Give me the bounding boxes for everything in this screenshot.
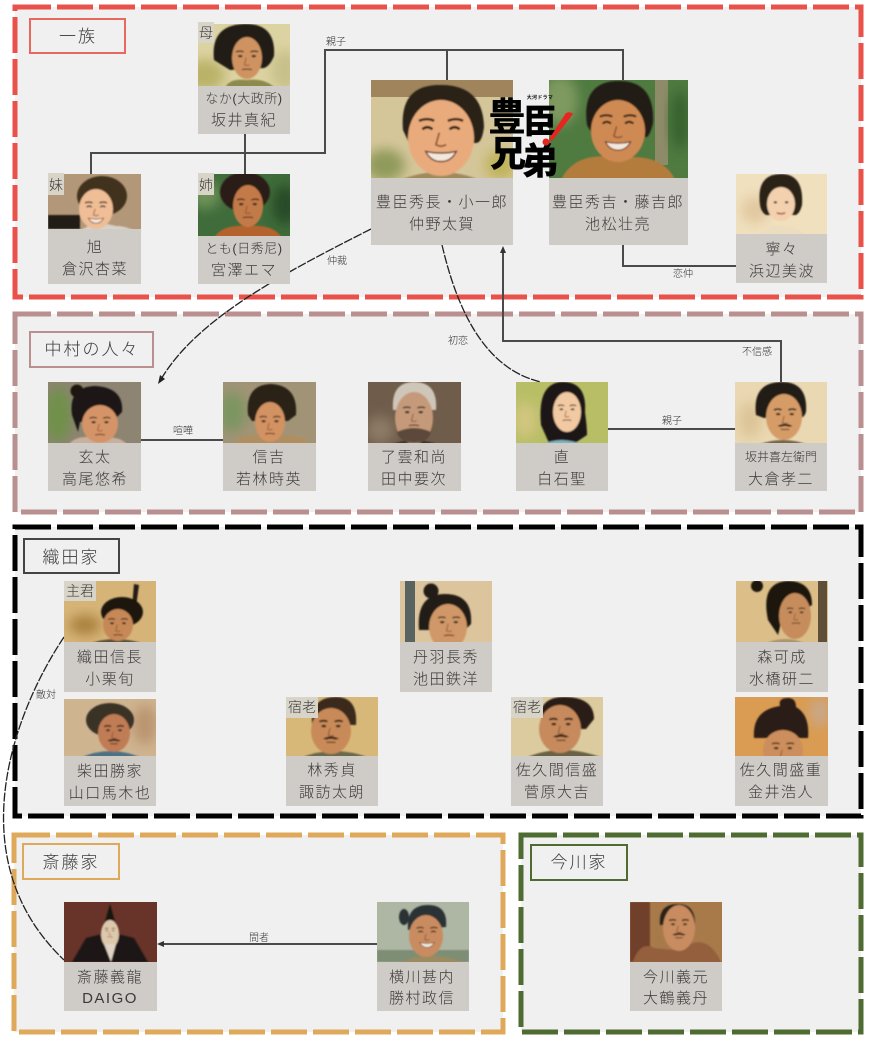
relation: 間者 arrow [157, 932, 377, 947]
logo: 豊臣兄弟: 大河ドラマ [527, 94, 553, 101]
card: 寧々: 浜辺美波 [749, 263, 815, 280]
tag: 宿老: 宿老 [513, 699, 541, 715]
card: 横川甚内 [377, 902, 469, 1011]
card: 直: 白石聖 [537, 471, 587, 488]
card: 佐久間盛重: 金井浩人 [748, 784, 814, 801]
card: 織田信長 [64, 581, 156, 692]
card: 佐久間信盛 [511, 697, 603, 806]
card: 玄太: 玄太 [78, 449, 112, 466]
card: 玄太: 高尾悠希 [62, 471, 128, 488]
card: 旭: 旭 [87, 239, 103, 256]
heading: 今川家 [531, 845, 627, 880]
card: とも: とも(日秀尼) [205, 241, 283, 256]
card: 佐久間信盛: 佐久間信盛 [516, 762, 598, 779]
card: 豊臣秀吉 [542, 75, 689, 245]
heading: 今川家: 今川家 [550, 853, 608, 872]
card: 丹羽長秀 [400, 581, 492, 692]
card: 柴田勝家: 山口馬木也 [69, 785, 151, 802]
panel: 一族 [15, 7, 861, 297]
card: とも: 宮澤エマ [211, 262, 277, 279]
card: 寧々 [736, 174, 827, 283]
panel: 織田家 [15, 527, 861, 816]
tag: 主君: 主君 [66, 583, 94, 599]
card: 坂井喜左衛門 [735, 382, 827, 491]
card: 林秀貞: 諏訪太朗 [299, 784, 365, 801]
heading: 斎藤家 [23, 844, 119, 879]
card: 坂井喜左衛門: 坂井喜左衛門 [745, 450, 817, 464]
card: 豊臣秀吉: 豊臣秀吉・藤吉郎 [552, 194, 684, 211]
relation: 恋仲 [623, 245, 736, 280]
heading: 一族: 一族 [59, 27, 97, 46]
card: 斎藤義龍: 斎藤義龍 [77, 969, 143, 986]
relation: 間者 arrow: 間者 [249, 932, 269, 944]
card: 旭 [48, 173, 141, 284]
heading: 中村の人々 [30, 332, 153, 367]
panel: 今川家 [521, 835, 861, 1032]
card: 横川甚内: 勝村政信 [389, 990, 455, 1007]
card: 了雲和尚: 田中要次 [381, 471, 447, 488]
card: 豊臣秀吉: 池松壮亮 [585, 216, 651, 233]
card: 寧々: 寧々 [765, 241, 799, 258]
card: 佐久間信盛: 菅原大吉 [524, 784, 590, 801]
relation: 仲裁 arrow [158, 229, 371, 384]
heading: 中村の人々: 中村の人々 [44, 340, 140, 359]
card: 今川義元: 今川義元 [643, 969, 709, 986]
relation: 親子 直 [608, 415, 735, 429]
card: 柴田勝家: 柴田勝家 [77, 763, 143, 780]
relation: 恋仲: 恋仲 [673, 268, 693, 280]
card: 豊臣秀長: 豊臣秀長・小一郎 [376, 194, 508, 211]
card: 森可成: 森可成 [757, 649, 807, 666]
card: 林秀貞: 林秀貞 [307, 762, 357, 779]
tag: 母: 母 [199, 25, 213, 41]
relation: 仲裁 arrow: 仲裁 [327, 254, 347, 267]
relation: 初恋 curve [442, 245, 541, 382]
card: 了雲和尚: 了雲和尚 [381, 449, 447, 466]
card: 森可成: 水橋研二 [749, 671, 815, 688]
card: 丹羽長秀: 池田鉄洋 [413, 671, 479, 688]
card: 直 [513, 382, 608, 491]
card: 斎藤義龍: DAIGO [82, 990, 138, 1007]
tag: 宿老: 宿老 [288, 699, 316, 715]
card: 林秀貞 [286, 697, 378, 806]
relation: 不信感 arrow [500, 246, 781, 382]
panel: 斎藤家 [14, 835, 503, 1032]
card: 坂井喜左衛門: 大倉孝二 [748, 471, 814, 488]
relation lines: 親子 family tree [91, 36, 623, 174]
relation: 親子 直: 親子 [662, 415, 682, 427]
card: なか [185, 22, 299, 134]
card: なか: なか(大政所) [205, 91, 283, 106]
panel: 中村の人々 [15, 314, 861, 512]
card: 信吉 [218, 382, 316, 491]
card: 了雲和尚 [366, 382, 461, 491]
logo: 豊臣兄弟: 兄 [490, 133, 526, 174]
relation: 初恋 curve: 初恋 [448, 334, 468, 347]
relation: 敵対 curve [4, 637, 64, 960]
card: 信吉: 信吉 [252, 449, 286, 466]
card: 信吉: 若林時英 [236, 471, 302, 488]
card: 斎藤義龍 [64, 902, 157, 1011]
card: 旭: 倉沢杏菜 [62, 261, 128, 278]
logo: 豊臣兄弟: 豊 [488, 97, 526, 139]
card: とも [190, 172, 297, 284]
card: 今川義元 [630, 902, 722, 1011]
card: 佐久間盛重 [735, 697, 830, 806]
relation: 喧嘩: 喧嘩 [173, 425, 193, 437]
card: 豊臣秀長: 仲野太賀 [409, 216, 475, 233]
logo: 豊臣兄弟: 臣 [523, 103, 557, 141]
card: 柴田勝家 [64, 699, 157, 806]
card: 豊臣秀長 [365, 80, 515, 245]
tag: 妹: 妹 [49, 177, 63, 193]
heading: 織田家 [24, 539, 119, 573]
relation: 不信感 arrow: 不信感 [742, 345, 772, 358]
relation lines: 親子 family tree: 親子 [326, 36, 346, 48]
heading: 一族 [30, 19, 125, 53]
card: 森可成 [736, 580, 828, 692]
card: なか: 坂井真紀 [211, 112, 277, 129]
relation: 敵対 curve: 敵対 [36, 688, 56, 701]
card: 横川甚内: 横川甚内 [389, 969, 455, 986]
card: 織田信長: 小栗旬 [85, 671, 135, 688]
heading: 織田家: 織田家 [42, 548, 100, 567]
card: 佐久間盛重: 佐久間盛重 [740, 762, 822, 779]
logo: 豊臣兄弟 [488, 94, 573, 182]
heading: 斎藤家: 斎藤家 [42, 853, 100, 872]
card: 丹羽長秀: 丹羽長秀 [413, 649, 479, 666]
relation: 喧嘩 [141, 425, 223, 440]
tag: 姉: 姉 [199, 177, 213, 193]
card: 直: 直 [554, 449, 570, 466]
card: 今川義元: 大鶴義丹 [643, 990, 709, 1007]
logo: 豊臣兄弟: 弟 [522, 141, 558, 182]
card: 玄太 [44, 382, 141, 491]
card: 織田信長: 織田信長 [77, 649, 143, 666]
